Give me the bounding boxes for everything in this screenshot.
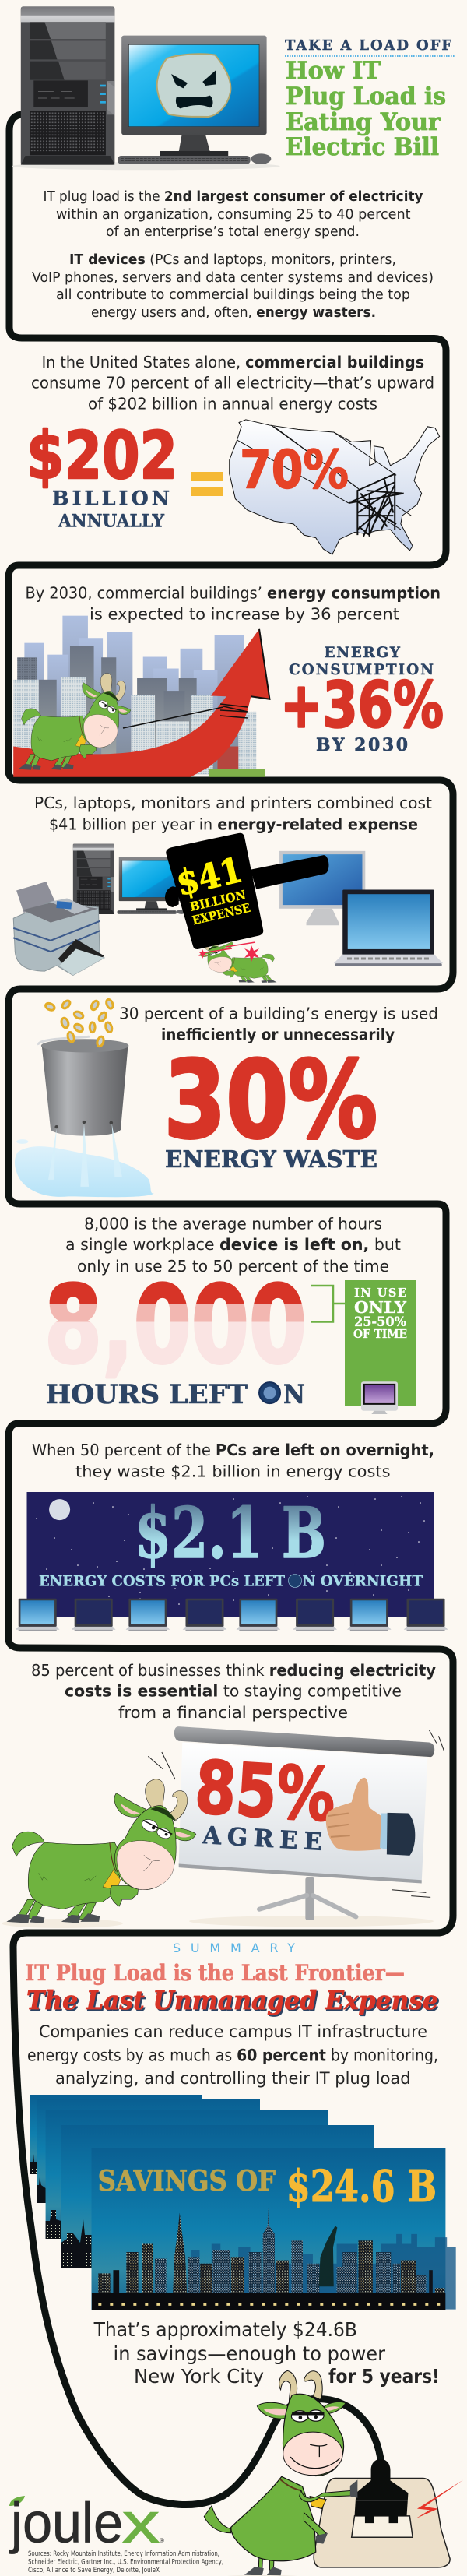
summary text: analyzing, and controlling their IT plug load — [55, 2069, 411, 2088]
panel: consumption by 2030 — [13, 584, 444, 777]
city skyline — [92, 2208, 456, 2310]
closing statement: New York City — [134, 2365, 264, 2388]
panel text — [31, 353, 434, 413]
panel text: In the United States alone, commercial buildings — [42, 353, 424, 371]
goat beside screen — [2, 1779, 196, 1928]
outlet with plug and spark — [314, 2459, 463, 2567]
joulex logo: x — [122, 2492, 160, 2554]
stat: energy consumption plus 36 percent: ENERGY — [324, 645, 401, 661]
hours left on label with power icon: HOURS LEFT — [46, 1379, 248, 1410]
sources: Schneider Electric, Gartner Inc., U.S. Environmental Protection Agency, — [28, 2559, 223, 2567]
agree label: AGREE — [201, 1821, 323, 1856]
panel text: PCs, laptops, monitors and printers combined cost — [34, 794, 432, 812]
savings amount: SAVINGS OF — [98, 2165, 276, 2198]
gavel with 41 billion expense: EXPENSE — [191, 900, 252, 927]
intro text: within an organization, consuming 25 to 40 percent — [56, 206, 411, 223]
stat: 85 percent: 85% — [193, 1745, 338, 1838]
panel text: inefficiently or unnecessarily — [161, 1026, 395, 1044]
big 8,000 stat: 8,000 — [44, 1264, 307, 1388]
panel text — [65, 1215, 401, 1276]
stat: 202 billion: ANNUALLY — [58, 511, 165, 531]
icon: thumbs up — [326, 1778, 415, 1856]
stat: 202 billion: $202 — [26, 417, 177, 494]
stat: 202 billion: BILLION — [52, 487, 170, 511]
laptop — [334, 889, 443, 966]
sources — [28, 2550, 223, 2574]
panel text: By 2030, commercial buildings’ energy consumption — [25, 584, 441, 603]
sources: Cisco, Alliance to Save Energy, Deloitte, JouleX — [28, 2567, 160, 2574]
panel text: 30 percent of a building’s energy is used — [119, 1005, 438, 1023]
equals sign — [191, 472, 223, 496]
panel: summary — [9, 1941, 463, 2576]
summary label: SUMMARY — [173, 1941, 295, 1955]
panel: PCs left on overnight — [16, 1441, 448, 1631]
summary text: energy costs by as much as 60 percent by monitoring, — [27, 2046, 438, 2064]
stacked savings cards with skyline — [30, 2095, 456, 2310]
panel text: of $202 billion in annual energy costs — [88, 395, 377, 413]
stat: 2.1 B: $2.1 B — [135, 1492, 326, 1575]
closing statement: That’s approximately $24.6B — [93, 2318, 357, 2341]
panel text: When 50 percent of the PCs are left on overnight, — [32, 1441, 434, 1459]
summary headline: The Last Unmanaged Expense — [26, 1985, 438, 2015]
summary headline: IT Plug Load is the Last Frontier— — [25, 1960, 405, 1986]
panel text: a single workplace device is left on, but — [65, 1235, 401, 1254]
gavel with 41 billion expense — [165, 833, 328, 949]
leaking bucket with coins — [15, 998, 154, 1197]
banner caption: N OVERNIGHT — [303, 1573, 423, 1590]
panel text — [32, 1441, 434, 1480]
goat plugging in cord — [204, 2370, 357, 2576]
gavel with 41 billion expense: $41 — [173, 850, 246, 904]
green in-use callout: IN USE — [354, 1286, 406, 1300]
panel text: from a financial perspective — [118, 1703, 348, 1722]
panel text: 85 percent of businesses think reducing electricity — [31, 1661, 436, 1680]
bracket connector — [311, 1286, 345, 1322]
title: How IT — [286, 57, 381, 85]
summary headline: The Last Unmanaged Expense — [28, 1987, 440, 2017]
stat: 30 percent: 30% — [164, 1039, 377, 1163]
panel text: $41 billion per year in energy-related expense — [49, 815, 418, 834]
summary headline — [25, 1960, 440, 2017]
energy waste label: ENERGY WASTE — [165, 1145, 377, 1173]
green in-use callout: 25-50% — [354, 1314, 406, 1330]
intro text: energy users and, often, energy wasters. — [91, 304, 376, 321]
large monitor — [279, 851, 365, 925]
panel text: 8,000 is the average number of hours — [84, 1215, 382, 1233]
panel text — [25, 584, 441, 624]
panel text: only in use 25 to 50 percent of the time — [77, 1257, 389, 1276]
night sky banner — [26, 1492, 434, 1617]
small flattened goat with impact sparks — [198, 938, 277, 983]
green in-use callout: ONLY — [354, 1298, 406, 1317]
panel text — [119, 1005, 438, 1044]
title: Eating Your — [286, 108, 441, 136]
title: Plug Load is — [286, 83, 446, 111]
panel: header — [12, 6, 455, 321]
intro text: IT devices (PCs and laptops, monitors, printers, — [69, 252, 396, 268]
stat: energy consumption plus 36 percent: BY 2030 — [316, 735, 408, 755]
panel text — [31, 1661, 436, 1722]
intro text: IT plug load is the 2nd largest consumer of electricity — [44, 188, 423, 205]
green in-use callout: OF TIME — [353, 1328, 407, 1341]
panel: 8000 hours left on — [44, 1215, 416, 1414]
intro text: VoIP phones, servers and data center systems and devices) — [32, 269, 434, 286]
title: Electric Bill — [286, 133, 439, 161]
printer — [13, 882, 104, 975]
joulex logo: joule — [9, 2492, 123, 2554]
panel text: is expected to increase by 36 percent — [90, 605, 399, 624]
green in-use callout — [345, 1280, 416, 1414]
red rising arrow — [13, 629, 269, 777]
panel text — [34, 794, 432, 834]
intro text: all contribute to commercial buildings being the top — [56, 287, 410, 303]
goat pulling the arrow with a rope — [18, 674, 248, 770]
sources: Sources: Rocky Mountain Institute, Energy Information Administration, — [28, 2550, 219, 2558]
dotted rule — [285, 55, 455, 57]
summary text — [27, 2022, 438, 2088]
hours left on label with power icon: N — [283, 1379, 305, 1410]
closing statement — [93, 2318, 440, 2388]
illustration: desktop computer with angry plug face — [12, 6, 280, 170]
joulex logo: ® — [160, 2537, 164, 2544]
projector screen — [148, 1726, 444, 1927]
banner caption: ENERGY COSTS FOR PCs LEFT — [39, 1573, 285, 1590]
panel: 41 billion expense — [13, 794, 443, 983]
stat: 202 billion — [26, 417, 177, 531]
closing statement: for 5 years! — [328, 2365, 440, 2388]
icon: moon — [49, 1499, 70, 1520]
panel: 30 percent energy waste — [15, 998, 438, 1197]
intro text — [32, 188, 434, 321]
panel text: consume 70 percent of all electricity—that’s upward — [31, 374, 434, 392]
intro text: of an enterprise’s total energy spend. — [106, 223, 360, 240]
stat: 70 percent: 70% — [240, 439, 349, 501]
panel: commercial buildings 70 percent — [26, 353, 440, 554]
row of laptops — [16, 1599, 448, 1631]
US map with transmission tower — [230, 420, 440, 554]
city skyline — [13, 616, 265, 777]
gavel with 41 billion expense: BILLION — [188, 887, 248, 914]
stat: energy consumption plus 36 percent: CONSUMPTION — [289, 662, 434, 678]
banner caption — [39, 1573, 423, 1590]
panel: 85 percent agree — [2, 1661, 444, 1928]
closing statement: in savings—enough to power — [114, 2342, 386, 2365]
summary text: Companies can reduce campus IT infrastructure — [39, 2022, 427, 2041]
panel text: costs is essential to staying competitive — [65, 1682, 402, 1701]
panel text: they waste $2.1 billion in energy costs — [75, 1462, 391, 1480]
title kicker: TAKE A LOAD OFF — [285, 37, 451, 54]
title — [286, 57, 446, 161]
stat: energy consumption plus 36 percent — [280, 645, 444, 755]
icon: small monitor — [361, 1381, 398, 1414]
tower and monitor — [73, 844, 186, 914]
